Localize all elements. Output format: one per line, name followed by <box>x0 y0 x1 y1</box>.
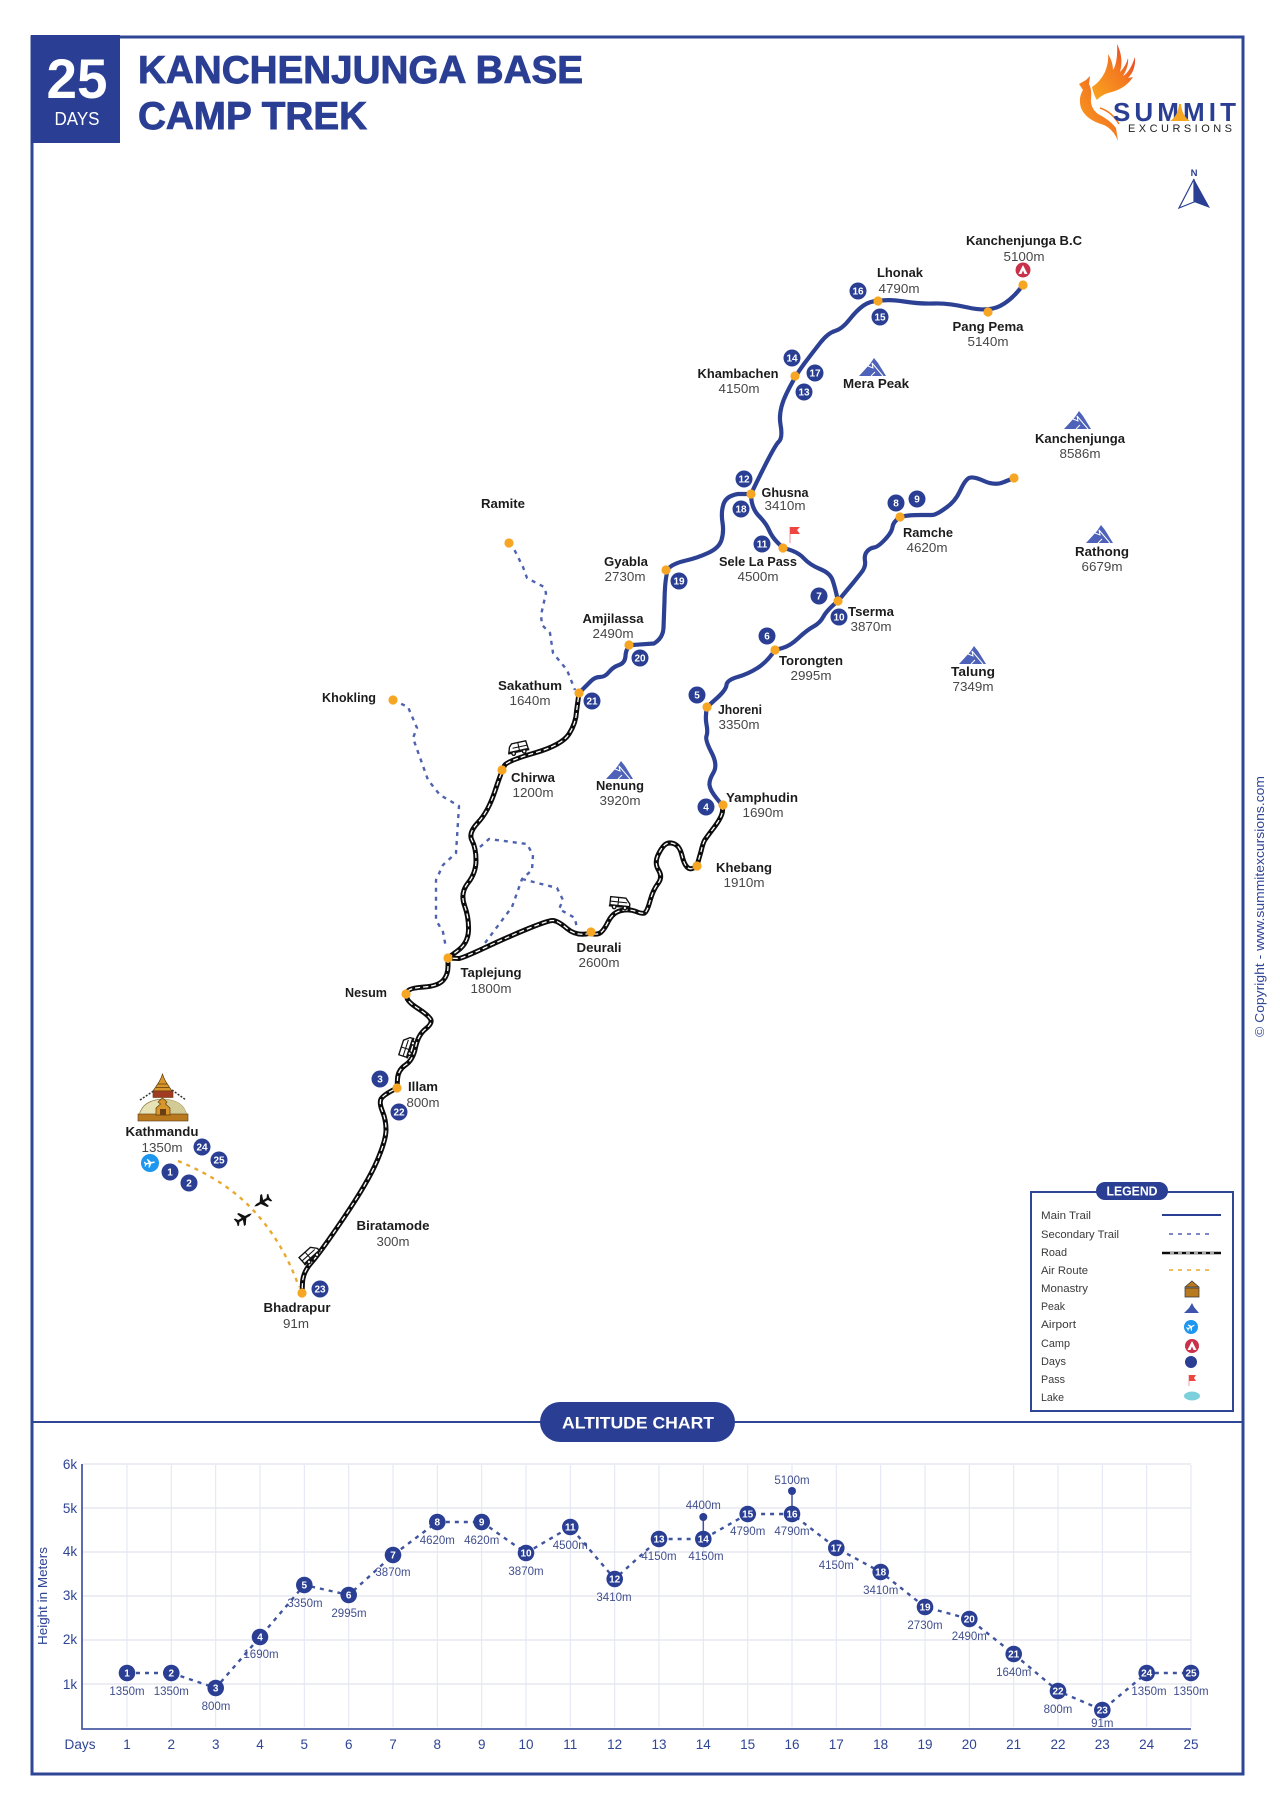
legend rows: Monastry <box>1041 1283 1089 1295</box>
altitude value labels: 1350m <box>154 1686 189 1698</box>
altitude value labels: 1350m <box>1173 1686 1209 1698</box>
high point markers: 5100m <box>774 1475 810 1487</box>
day badges on map: 6 <box>764 632 770 642</box>
place labels: Nenung <box>596 778 644 793</box>
day badges on map: 21 <box>586 696 598 708</box>
y axis labels <box>35 1457 77 1692</box>
day markers: 12 <box>609 1574 621 1586</box>
day markers: 7 <box>390 1550 396 1562</box>
day badges on map: 25 <box>213 1156 225 1166</box>
legend rows: Main Trail <box>1041 1210 1091 1222</box>
altitude value labels: 800m <box>202 1701 230 1713</box>
day markers: 20 <box>964 1614 975 1626</box>
altitude chart <box>35 1457 1209 1752</box>
altitude value labels: 3870m <box>508 1566 544 1578</box>
day markers: 14 <box>698 1534 709 1546</box>
legend rows <box>1041 1210 1221 1404</box>
day badges on map: 5 <box>694 690 700 702</box>
place labels: 8586m <box>1060 446 1100 461</box>
day markers: 4 <box>257 1632 263 1644</box>
day badges on map: 22 <box>393 1108 405 1118</box>
x axis labels: 22 <box>1050 1737 1066 1752</box>
altitude chart heading <box>540 1402 735 1442</box>
place labels: 3870m <box>850 619 892 634</box>
place labels: Nesum <box>345 985 387 1000</box>
altitude value labels: 2995m <box>331 1608 367 1620</box>
place labels: Illam <box>408 1079 438 1094</box>
place labels: Rathong <box>1075 544 1129 559</box>
x axis labels: 18 <box>873 1737 888 1752</box>
place labels: 4500m <box>738 569 778 584</box>
altitude value labels <box>109 1526 1209 1730</box>
title: CAMP TREK <box>138 95 367 138</box>
day markers <box>119 1506 1199 1718</box>
high point markers: 4400m <box>686 1500 721 1512</box>
place labels: Mera Peak <box>843 376 910 391</box>
altitude value labels: 4150m <box>819 1560 854 1572</box>
altitude value labels: 3870m <box>375 1567 411 1579</box>
place labels: Amjilassa <box>582 611 644 626</box>
day badges on map: 18 <box>735 504 747 516</box>
day markers: 25 <box>1185 1668 1197 1680</box>
legend rows: Airport <box>1041 1319 1076 1331</box>
title <box>138 49 583 138</box>
day markers: 16 <box>786 1510 798 1520</box>
day badges on map: 20 <box>634 654 646 664</box>
legend rows: Peak <box>1041 1301 1065 1313</box>
main trail <box>579 285 1023 805</box>
place labels: 1800m <box>470 981 512 996</box>
north arrow <box>1179 168 1210 208</box>
icon: camp <box>1016 262 1030 278</box>
legend rows: Lake <box>1041 1392 1064 1404</box>
high point markers <box>686 1475 810 1531</box>
place labels: 3410m <box>764 498 806 513</box>
altitude value labels: 3410m <box>863 1585 898 1597</box>
x axis labels: 23 <box>1095 1737 1110 1752</box>
legend rows: Pass <box>1041 1374 1065 1386</box>
place labels: Tserma <box>848 604 895 619</box>
place labels: 2600m <box>578 955 620 970</box>
y axis labels: 3k <box>63 1588 77 1603</box>
place labels: 1640m <box>510 693 550 708</box>
place labels: Pang Pema <box>952 319 1024 334</box>
day markers: 1 <box>124 1668 130 1680</box>
day badges on map: 3 <box>377 1074 383 1086</box>
altitude value labels: 4790m <box>730 1526 765 1538</box>
peak icons <box>606 358 1113 779</box>
day markers: 10 <box>520 1548 532 1560</box>
x axis labels: 2 <box>168 1737 175 1752</box>
x axis labels: 13 <box>651 1737 667 1752</box>
x axis labels: 1 <box>123 1737 131 1752</box>
legend panel <box>1031 1182 1233 1411</box>
y axis labels: 6k <box>63 1457 77 1472</box>
place labels: 3920m <box>600 793 640 808</box>
x axis labels: 8 <box>434 1737 441 1752</box>
day markers: 19 <box>919 1602 931 1614</box>
day badges on map: 14 <box>786 354 798 364</box>
place labels: Deurali <box>576 940 622 955</box>
day badges on map: 9 <box>914 494 920 506</box>
place labels: 4620m <box>906 540 948 555</box>
place labels: 5100m <box>1004 249 1044 264</box>
x axis labels: 21 <box>1006 1737 1021 1752</box>
altitude value labels: 91m <box>1091 1718 1113 1730</box>
place labels: Torongten <box>779 653 843 668</box>
altitude value labels: 3350m <box>287 1598 323 1610</box>
place labels: Biratamode <box>356 1218 430 1233</box>
legend heading <box>1096 1182 1168 1200</box>
place labels: 4790m <box>878 281 920 296</box>
place labels: Chirwa <box>511 770 556 785</box>
x axis labels: 17 <box>829 1737 844 1752</box>
altitude value labels: 800m <box>1044 1704 1072 1716</box>
day badges on map: 2 <box>186 1178 192 1190</box>
trail stops <box>297 280 1028 1298</box>
place labels: 800m <box>406 1095 440 1110</box>
place labels: 91m <box>283 1316 309 1331</box>
place labels: Khokling <box>322 690 376 705</box>
vehicle icons <box>298 740 631 1267</box>
logo: Summit Excursions: EXCURSIONS <box>1128 123 1232 135</box>
place labels: Kanchenjunga B.C <box>966 233 1083 248</box>
place labels: 1200m <box>512 785 554 800</box>
day markers: 13 <box>653 1534 665 1546</box>
day markers: 17 <box>831 1544 842 1554</box>
x axis labels: 5 <box>301 1737 308 1752</box>
day markers: 18 <box>875 1568 887 1578</box>
place labels: Ramite <box>481 496 525 511</box>
altitude line <box>127 1514 1191 1710</box>
day markers: 3 <box>213 1684 219 1694</box>
road <box>302 693 723 1293</box>
day badges on map: 16 <box>852 286 864 298</box>
day badges on map: 8 <box>893 498 899 510</box>
y axis labels: 2k <box>63 1632 77 1647</box>
place labels: Jhoreni <box>718 702 762 717</box>
place labels: 1910m <box>724 875 764 890</box>
place labels: Yamphudin <box>726 790 798 805</box>
altitude value labels: 4790m <box>774 1526 810 1538</box>
x axis labels <box>64 1737 1199 1752</box>
altitude value labels: 1640m <box>996 1667 1031 1679</box>
place labels: 6679m <box>1082 559 1122 574</box>
day badges on map: 13 <box>798 388 810 398</box>
days badge: 25 <box>46 47 108 110</box>
day badges on map: 24 <box>196 1142 208 1154</box>
day badges on map: 23 <box>314 1284 326 1296</box>
place labels: Kathmandu <box>126 1124 199 1139</box>
y axis labels: Height in Meters <box>35 1546 50 1645</box>
day badges on map: 17 <box>809 368 821 380</box>
x axis labels: 19 <box>917 1737 933 1752</box>
icon: monastery stupa <box>138 1074 188 1121</box>
place labels <box>126 233 1129 1331</box>
x axis labels: 3 <box>212 1737 219 1752</box>
legend rows: Secondary Trail <box>1041 1229 1119 1241</box>
altitude value labels: 4150m <box>641 1551 677 1563</box>
place labels: Ghusna <box>762 485 809 500</box>
x axis labels: 24 <box>1139 1737 1155 1752</box>
place labels: 1350m <box>142 1140 182 1155</box>
legend rows: Days <box>1041 1356 1066 1368</box>
day markers: 5 <box>302 1580 308 1592</box>
place labels: Ramche <box>903 525 953 540</box>
x axis labels: 4 <box>256 1737 264 1752</box>
title: KANCHENJUNGA BASE <box>138 49 583 92</box>
x axis labels: 25 <box>1183 1737 1199 1752</box>
place labels: Sakathum <box>498 678 562 693</box>
x axis labels: 16 <box>784 1737 800 1752</box>
plane icons <box>232 1191 274 1229</box>
x axis labels: 20 <box>962 1737 977 1752</box>
x axis labels: 14 <box>696 1737 711 1752</box>
altitude value labels: 1690m <box>243 1649 279 1661</box>
day badges on map: 1 <box>167 1168 173 1178</box>
place labels: 2490m <box>592 626 634 641</box>
x axis labels: 10 <box>518 1737 534 1752</box>
north arrow: N <box>1191 168 1198 179</box>
place labels: Bhadrapur <box>264 1300 330 1315</box>
day markers: 6 <box>346 1590 352 1602</box>
y axis labels: 1k <box>63 1677 77 1692</box>
place labels: Khambachen <box>698 366 779 381</box>
day markers: 22 <box>1052 1686 1064 1698</box>
place labels: Khebang <box>716 860 772 875</box>
legend rows: Camp <box>1041 1338 1070 1350</box>
altitude value labels: 4500m <box>553 1540 588 1552</box>
place labels: 4150m <box>718 381 760 396</box>
place labels: Taplejung <box>460 965 522 980</box>
place labels: 300m <box>376 1234 410 1249</box>
copyright: © Copyright - www.summitexcursions.com <box>1253 776 1267 1037</box>
altitude value labels: 2490m <box>952 1631 987 1643</box>
place labels: 2995m <box>790 668 832 683</box>
legend rows: Air Route <box>1041 1265 1088 1277</box>
altitude value labels: 3410m <box>596 1592 632 1604</box>
altitude value labels: 1350m <box>109 1686 145 1698</box>
days badge: DAYS <box>54 109 100 129</box>
day markers: 8 <box>435 1518 441 1528</box>
place labels: 1690m <box>742 805 784 820</box>
air route <box>178 1161 299 1287</box>
day badges on map: 12 <box>738 474 750 486</box>
legend rows: Road <box>1041 1247 1067 1259</box>
altitude value labels: 1350m <box>1131 1686 1167 1698</box>
x axis labels: 9 <box>478 1737 485 1752</box>
day badges on map <box>162 282 926 1298</box>
x axis labels: 6 <box>345 1737 352 1752</box>
place labels: 3350m <box>718 717 760 732</box>
altitude value labels: 4150m <box>688 1551 724 1563</box>
icon: airport <box>141 1154 159 1172</box>
altitude value labels: 2730m <box>907 1620 943 1632</box>
logo: Summit Excursions <box>1079 44 1236 141</box>
altitude value labels: 4620m <box>420 1535 455 1547</box>
x axis labels: 15 <box>740 1737 755 1752</box>
x axis labels: Days <box>64 1737 96 1752</box>
legend heading: LEGEND <box>1106 1184 1158 1198</box>
altitude value labels: 4620m <box>464 1535 499 1547</box>
place labels: 7349m <box>952 679 994 694</box>
x axis labels: 7 <box>389 1737 397 1752</box>
day markers: 23 <box>1097 1706 1108 1716</box>
days badge <box>31 35 120 143</box>
day badges on map: 15 <box>874 312 886 324</box>
day markers: 11 <box>565 1522 576 1534</box>
day badges on map: 19 <box>673 576 685 588</box>
x axis labels: 11 <box>563 1737 577 1752</box>
place labels: 2730m <box>604 569 646 584</box>
day markers: 2 <box>169 1668 175 1680</box>
place labels: Lhonak <box>877 265 924 280</box>
place labels: Talung <box>951 664 995 679</box>
day badges on map: 7 <box>816 592 822 602</box>
day markers: 15 <box>742 1510 754 1520</box>
day badges on map: 4 <box>703 802 709 814</box>
place labels: Sele La Pass <box>719 554 797 569</box>
day markers: 21 <box>1008 1650 1020 1660</box>
place labels: Gyabla <box>604 554 649 569</box>
day badges on map: 10 <box>833 612 845 624</box>
place labels: 5140m <box>968 334 1008 349</box>
logo: Summit Excursions: SUMMIT <box>1113 97 1236 127</box>
place labels: Kanchenjunga <box>1035 431 1126 446</box>
icon: pass flag <box>790 527 800 543</box>
day badges on map: 11 <box>757 540 768 550</box>
altitude divider <box>32 1421 1243 1423</box>
y axis labels: 4k <box>63 1544 77 1559</box>
x axis labels: 12 <box>607 1737 622 1752</box>
day markers: 24 <box>1141 1668 1153 1680</box>
day markers: 9 <box>479 1518 485 1528</box>
altitude chart heading: ALTITUDE CHART <box>562 1414 715 1432</box>
secondary trails <box>393 543 577 948</box>
y axis labels: 5k <box>63 1501 77 1516</box>
